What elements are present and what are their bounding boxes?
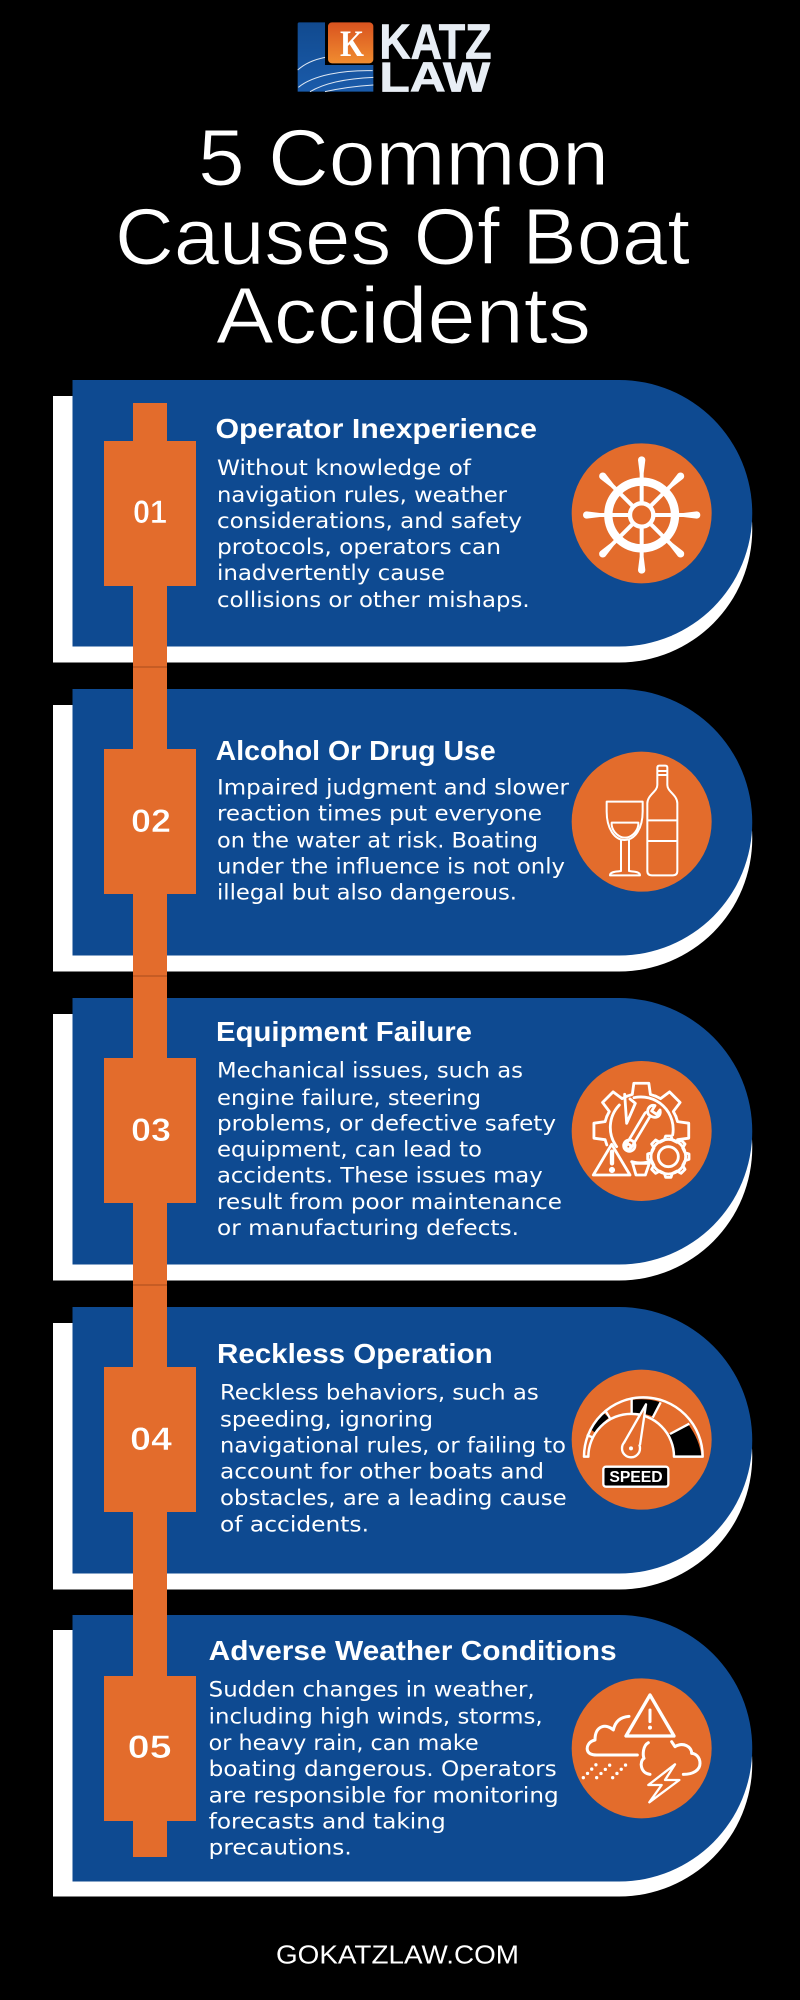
- title: [115, 113, 690, 360]
- number tab 03: 03: [131, 1112, 171, 1148]
- panel: operator inexperience: [53, 380, 752, 662]
- text block: reckless operation: of accidents.: [220, 1512, 369, 1537]
- text block: operator inexperience: Without knowledge of: [217, 456, 471, 481]
- heading: adverse weather conditions: Adverse Weather Conditions: [209, 1635, 617, 1666]
- title: Accidents: [216, 271, 591, 360]
- heading: equipment failure: Equipment Failure: [216, 1016, 472, 1047]
- text block: equipment failure: engine failure, steering: [217, 1086, 481, 1111]
- text block: adverse weather conditions: or heavy rain, can make: [209, 1731, 479, 1756]
- panel: equipment failure: [53, 998, 752, 1280]
- text block: alcohol or drug use: on the water at risk. Boating: [217, 828, 538, 853]
- title: 5 Common: [198, 113, 609, 202]
- number tab 04: [104, 1367, 196, 1512]
- text block: alcohol or drug use: [217, 775, 569, 906]
- icon: ship helm: [572, 443, 712, 583]
- text block: equipment failure: problems, or defective safety: [217, 1112, 556, 1137]
- text block: operator inexperience: protocols, operators can: [217, 535, 501, 560]
- text block: alcohol or drug use: Impaired judgment and slower: [217, 775, 569, 800]
- number tab 01: [104, 441, 196, 586]
- text block: operator inexperience: collisions or other mishaps.: [217, 588, 530, 613]
- text block: adverse weather conditions: are responsible for monitoring: [209, 1783, 559, 1808]
- number tab 03: [104, 1058, 196, 1203]
- number tab 01: 01: [133, 494, 167, 530]
- number tab 04: 04: [130, 1421, 172, 1457]
- text block: operator inexperience: navigation rules, weather: [217, 483, 507, 508]
- timeline: connector and number tabs: [104, 403, 196, 1857]
- logo: KATZ: [379, 15, 492, 69]
- text block: adverse weather conditions: [209, 1678, 559, 1860]
- logo: [298, 15, 492, 101]
- text block: reckless operation: navigational rules, or failing to: [220, 1434, 566, 1459]
- text block: operator inexperience: considerations, and safety: [217, 509, 522, 534]
- title: Causes Of Boat: [115, 192, 690, 281]
- icon: gears and wrench: [572, 1061, 712, 1201]
- text block: operator inexperience: [217, 456, 530, 613]
- text block: reckless operation: speeding, ignoring: [220, 1408, 433, 1433]
- heading: reckless operation: Reckless Operation: [217, 1338, 493, 1369]
- panel: alcohol or drug use: [53, 689, 752, 972]
- logo: LAW: [379, 55, 490, 101]
- text block: alcohol or drug use: under the influence is not only: [217, 854, 565, 879]
- icon: storm warning: [572, 1678, 712, 1818]
- icon: speedometer: [572, 1370, 712, 1510]
- number tab 02: 02: [131, 803, 171, 839]
- text block: reckless operation: account for other boats and: [220, 1460, 544, 1485]
- text block: reckless operation: Reckless behaviors, such as: [220, 1380, 539, 1405]
- footer url: GOKATZLAW.COM: [276, 1940, 519, 1970]
- text block: adverse weather conditions: boating dangerous. Operators: [209, 1757, 557, 1782]
- text block: operator inexperience: inadvertently cause: [217, 561, 445, 586]
- text block: reckless operation: obstacles, are a leading cause: [220, 1486, 567, 1511]
- text block: equipment failure: or manufacturing defects.: [217, 1216, 519, 1241]
- text block: adverse weather conditions: precautions.: [209, 1835, 352, 1860]
- text block: equipment failure: Mechanical issues, such as: [217, 1059, 523, 1084]
- logo: K: [340, 24, 364, 65]
- text block: equipment failure: [217, 1059, 562, 1241]
- heading: alcohol or drug use: Alcohol Or Drug Use: [216, 735, 496, 766]
- text block: adverse weather conditions: forecasts and taking: [209, 1810, 446, 1835]
- text block: alcohol or drug use: illegal but also dangerous.: [217, 881, 517, 906]
- icon: wine glass and bottle: [572, 752, 712, 892]
- number tab 05: [104, 1676, 196, 1821]
- panel: reckless operation: [53, 1307, 752, 1590]
- icon: speedometer: SPEED: [609, 1469, 663, 1486]
- heading: operator inexperience: Operator Inexperience: [216, 413, 537, 444]
- text block: equipment failure: equipment, can lead to: [217, 1138, 482, 1163]
- text block: equipment failure: result from poor maintenance: [217, 1190, 562, 1215]
- text block: adverse weather conditions: including high winds, storms,: [209, 1704, 543, 1729]
- panel: adverse weather conditions: [53, 1615, 752, 1896]
- text block: reckless operation: [220, 1380, 567, 1537]
- number tab 02: [104, 749, 196, 894]
- text block: adverse weather conditions: Sudden changes in weather,: [209, 1678, 535, 1703]
- text block: equipment failure: accidents. These issues may: [217, 1164, 543, 1189]
- number tab 05: 05: [128, 1729, 172, 1765]
- text block: alcohol or drug use: reaction times put everyone: [217, 802, 542, 827]
